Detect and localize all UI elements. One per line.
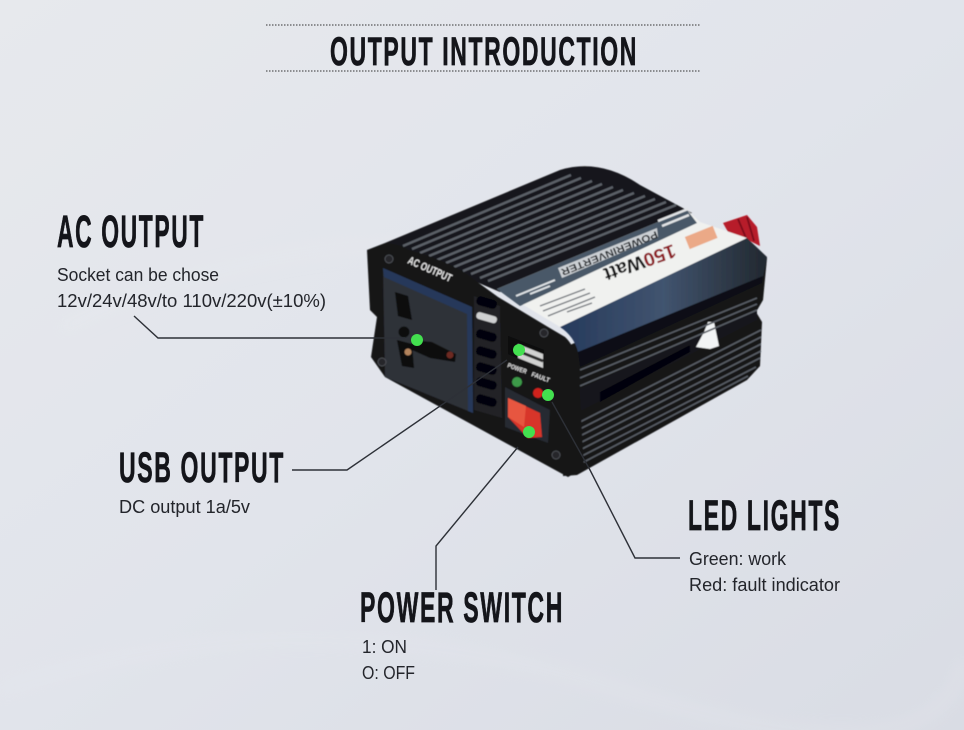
- title: OUTPUT INTRODUCTION: [330, 30, 638, 74]
- AC output callout: [57, 206, 326, 311]
- screws: [378, 255, 560, 459]
- vent slots: [474, 295, 502, 418]
- LED lights callout: [688, 492, 841, 595]
- socket: [383, 268, 473, 413]
- leader line: power switch: [436, 447, 518, 590]
- leader line: LED lights: [552, 402, 680, 558]
- usb port: [508, 336, 544, 369]
- text: power inverter: POWERINVERTER: [559, 228, 659, 277]
- LED lights callout: Red: fault indicator: [689, 575, 840, 595]
- power switch callout: 1: ON: [362, 637, 407, 657]
- indicator dots: [411, 334, 554, 438]
- orange badge: [685, 226, 718, 249]
- inverter device illustration: [367, 166, 767, 477]
- switch: [505, 387, 550, 443]
- text: fault label: FAULT: [530, 371, 551, 384]
- red terminal: [723, 215, 760, 246]
- USB output callout: DC output 1a/5v: [119, 497, 250, 517]
- power switch callout: POWER SWITCH: [360, 584, 564, 632]
- text: power label: POWER: [506, 362, 528, 376]
- label plate: [497, 209, 747, 327]
- bevel edge: [560, 238, 767, 352]
- power switch callout: O: OFF: [362, 663, 415, 683]
- USB output callout: USB OUTPUT: [119, 444, 285, 492]
- AC output callout: AC OUTPUT: [57, 206, 205, 257]
- AC output callout: Socket can be chose: [57, 265, 219, 285]
- AC output callout: 12v/24v/48v/to 110v/220v(±10%): [57, 291, 326, 311]
- white tag: [696, 322, 719, 349]
- leds: [512, 377, 522, 387]
- text: 150Watt: 150Watt: [600, 239, 678, 284]
- text: AC OUTPUT: AC OUTPUT: [406, 255, 454, 285]
- LED lights callout: Green: work: [689, 549, 787, 569]
- leader line: AC output: [134, 316, 405, 338]
- power switch callout: [360, 584, 564, 683]
- USB output callout: [119, 444, 285, 517]
- leader line: USB output: [292, 360, 507, 470]
- front panel: [367, 243, 584, 477]
- top fins: [385, 166, 692, 292]
- side panel with fins: [563, 258, 767, 476]
